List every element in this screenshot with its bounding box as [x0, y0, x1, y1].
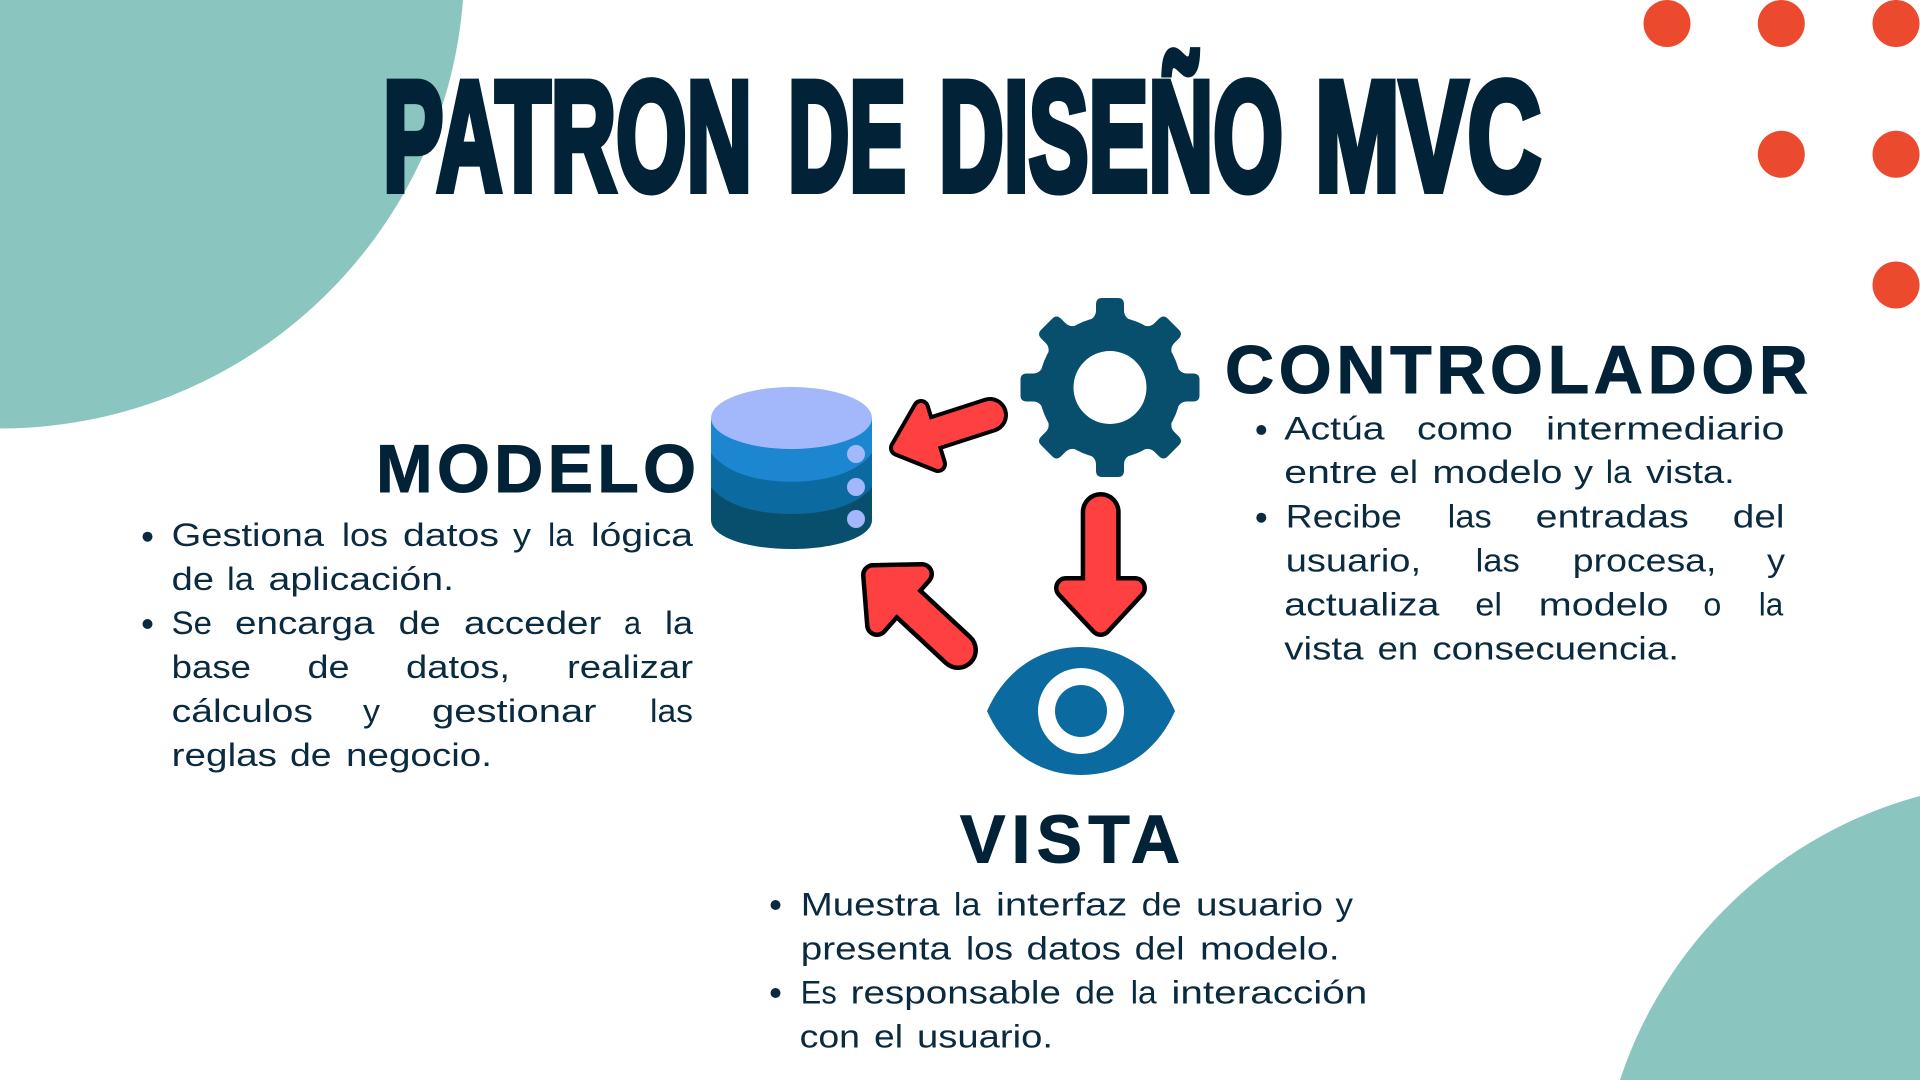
text block: modelo bullets: de	[399, 605, 441, 641]
text block: modelo bullets: a	[624, 605, 641, 641]
text block: modelo bullets: las	[650, 693, 693, 729]
text block: modelo bullets: aplicación.	[268, 561, 454, 597]
text block: modelo bullets: realizar	[567, 649, 693, 685]
text block: vista bullets: de	[1142, 887, 1182, 923]
text block: controlador bullets: intermediario	[1546, 410, 1784, 446]
text block: modelo bullets: acceder	[464, 605, 602, 641]
heading: vista: VISTA	[960, 802, 1180, 878]
text block: vista bullets: Es	[801, 974, 837, 1010]
text block: controlador bullets: del	[1733, 499, 1784, 535]
text block: controlador bullets	[1256, 410, 1785, 666]
arrow: vista to modelo	[873, 574, 958, 650]
text block: controlador bullets: en	[1378, 630, 1418, 666]
text block: controlador bullets: usuario,	[1286, 543, 1421, 579]
text block: modelo bullets: base	[172, 649, 251, 685]
text block: controlador bullets: como	[1417, 410, 1513, 446]
text block: controlador bullets: entre	[1284, 454, 1378, 490]
text block: controlador bullets: la	[1759, 587, 1783, 623]
text block: modelo bullets: la	[665, 605, 693, 641]
text block: controlador bullets: consecuencia.	[1432, 630, 1679, 666]
icon: gear	[1020, 298, 1200, 477]
decorative teal circle: top left	[0, 0, 463, 428]
heading: controlador: CONTROLADOR	[1225, 332, 1808, 408]
text block: controlador bullets: Actúa	[1284, 410, 1385, 446]
text block: modelo bullets: la	[227, 561, 254, 597]
text block: controlador bullets: y	[1574, 454, 1593, 490]
icon: eye	[987, 647, 1175, 775]
decorative red dots: top right	[1644, 0, 1920, 308]
text block: modelo bullets: lógica	[591, 517, 693, 553]
text block: vista bullets: responsable	[851, 974, 1061, 1010]
icon: database	[711, 387, 872, 549]
text block: controlador bullets: la	[1606, 454, 1632, 490]
text block: modelo bullets: los	[342, 517, 388, 553]
text block: modelo bullets: cálculos	[172, 693, 313, 729]
text block: controlador bullets: modelo	[1539, 587, 1668, 623]
text block: modelo bullets: Gestiona	[172, 517, 324, 553]
text block: controlador bullets: vista	[1284, 630, 1364, 666]
text block: controlador bullets: modelo	[1432, 454, 1562, 490]
text block: vista bullets: usuario	[1196, 887, 1323, 923]
arrow: controlador to modelo	[898, 408, 990, 464]
text block: modelo bullets: de	[308, 649, 350, 685]
text block: modelo bullets: de	[172, 561, 214, 597]
text block: controlador bullets: el	[1390, 454, 1418, 490]
text block: modelo bullets: negocio.	[346, 737, 492, 773]
text block: vista bullets: interacción	[1171, 974, 1367, 1010]
title: DE	[788, 50, 906, 224]
arrow: controlador to vista	[1066, 512, 1135, 625]
text block: vista bullets: los	[966, 930, 1013, 966]
text block: vista bullets: y	[1336, 887, 1353, 923]
text block: vista bullets: modelo.	[1200, 930, 1340, 966]
text block: modelo bullets: de	[290, 737, 332, 773]
text block: vista bullets: la	[954, 887, 981, 923]
text block: vista bullets	[770, 887, 1367, 1054]
text block: modelo bullets: reglas	[172, 737, 277, 773]
text block: modelo bullets: Se	[172, 605, 212, 641]
text block: modelo bullets: datos	[403, 517, 499, 553]
text block: vista bullets: de	[1075, 974, 1115, 1010]
heading: modelo: MODELO	[376, 431, 696, 507]
text block: modelo bullets: la	[548, 517, 574, 553]
text block: modelo bullets	[142, 517, 693, 773]
text block: controlador bullets: el	[1475, 587, 1502, 623]
text block: modelo bullets: encarga	[235, 605, 375, 641]
text block: vista bullets: presenta	[801, 930, 951, 966]
title: MVC	[1315, 50, 1541, 224]
text block: vista bullets: datos	[1026, 930, 1121, 966]
text block: controlador bullets: entradas	[1536, 499, 1689, 535]
text block: controlador bullets: Recibe	[1286, 499, 1402, 535]
text block: modelo bullets: datos,	[406, 649, 510, 685]
text block: modelo bullets: y	[363, 693, 380, 729]
text block: modelo bullets: y	[513, 517, 531, 553]
text block: controlador bullets: las	[1448, 499, 1492, 535]
text block: controlador bullets: o	[1703, 587, 1721, 623]
text block: vista bullets: del	[1135, 930, 1184, 966]
text block: vista bullets: con	[800, 1018, 860, 1054]
text block: controlador bullets: las	[1476, 543, 1520, 579]
decorative teal circle: bottom right	[1620, 796, 1920, 1080]
title	[383, 50, 1541, 224]
text block: controlador bullets: y	[1767, 543, 1785, 579]
text block: modelo bullets: gestionar	[432, 693, 597, 729]
title: PATRON	[383, 50, 752, 224]
text block: vista bullets: la	[1131, 974, 1157, 1010]
text block: vista bullets: interfaz	[996, 887, 1127, 923]
text block: vista bullets: Muestra	[801, 887, 940, 923]
title: DISEÑO	[939, 50, 1283, 224]
text block: controlador bullets: procesa,	[1573, 543, 1716, 579]
text block: vista bullets: usuario.	[917, 1018, 1053, 1054]
text block: controlador bullets: actualiza	[1284, 587, 1440, 623]
text block: controlador bullets: vista.	[1646, 454, 1735, 490]
text block: vista bullets: el	[874, 1018, 903, 1054]
